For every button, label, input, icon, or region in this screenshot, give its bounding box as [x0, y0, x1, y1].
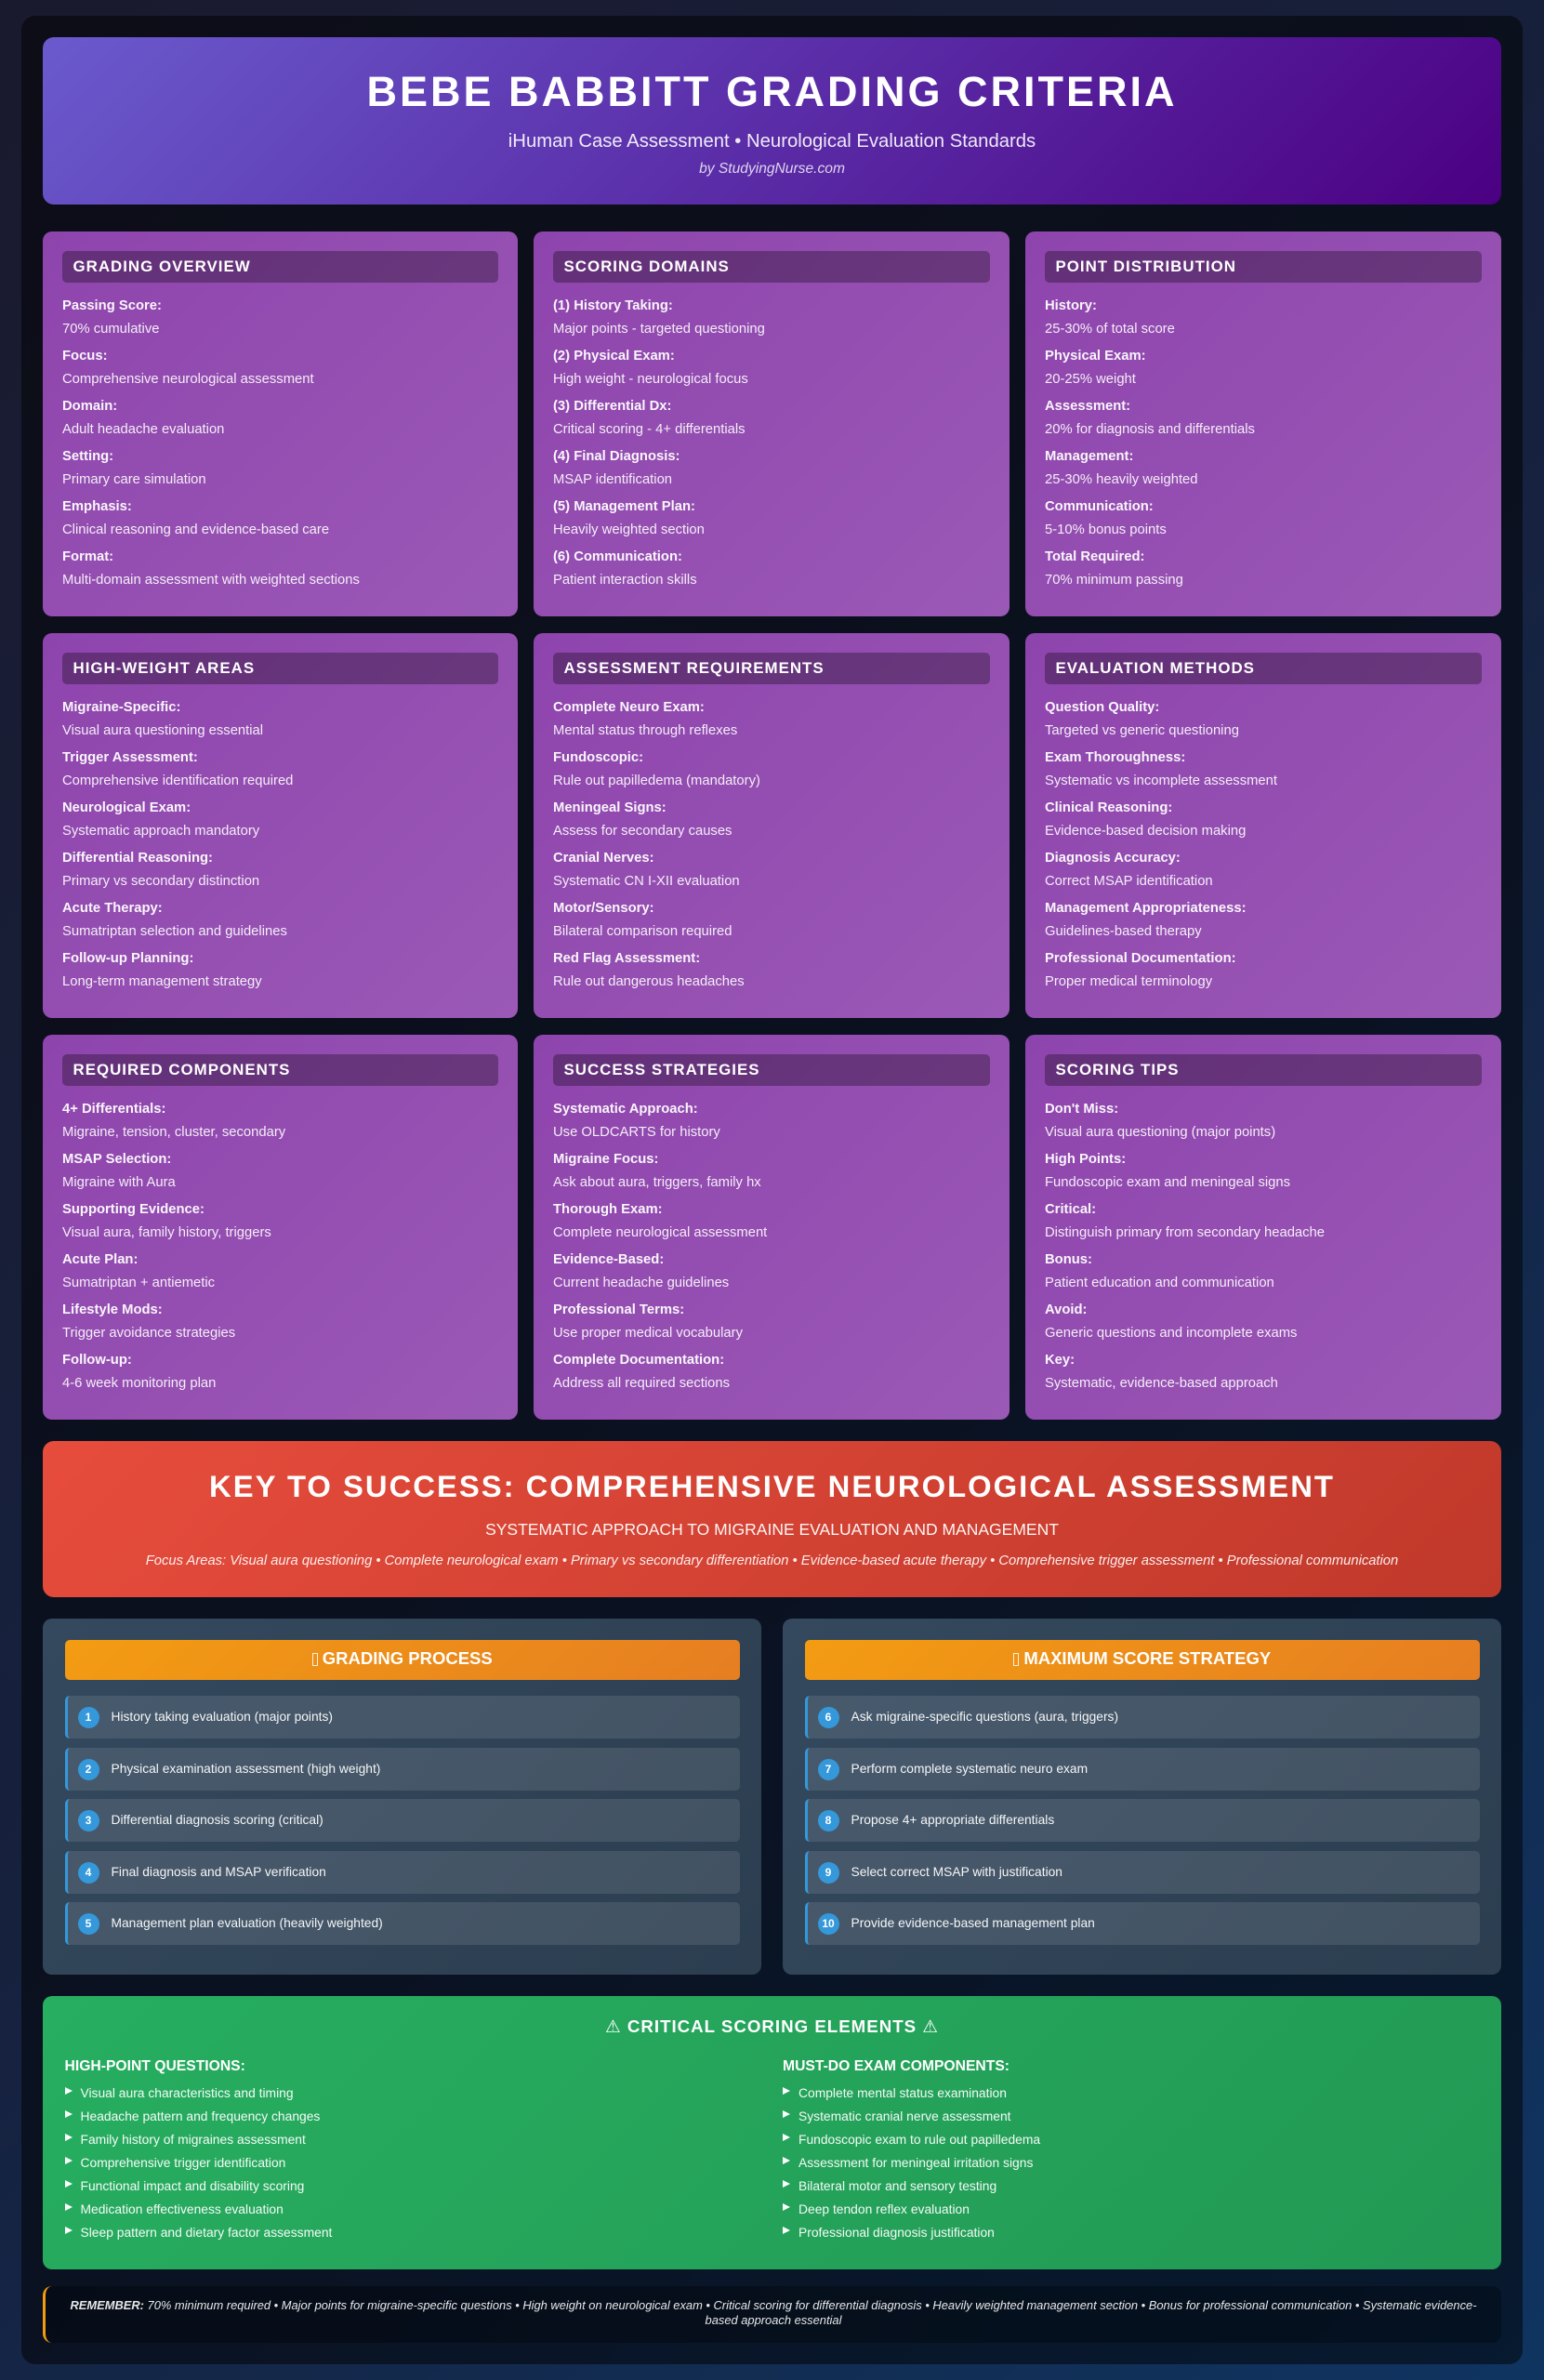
item: management appropriateness: Management Appropriateness: — [1045, 901, 1247, 916]
item: format: Multi-domain assessment with weighted sections — [62, 573, 360, 588]
item: acute plan: Sumatriptan + antiemetic — [62, 1276, 215, 1290]
panel: scoring tips — [1025, 1035, 1501, 1420]
item: communication: Patient interaction skills — [553, 573, 697, 588]
step 2: Physical examination assessment (high weight) — [112, 1762, 380, 1776]
panel: success strategies — [534, 1035, 1010, 1420]
step 1 — [65, 1696, 740, 1739]
item: differentials: Migraine, tension, cluster, secondary — [62, 1125, 285, 1140]
list: high-point questions: Family history of migraines assessment — [80, 2132, 306, 2147]
item: fundoscopic — [553, 750, 760, 788]
item: acute therapy: Acute Therapy: — [62, 901, 163, 916]
item: msap selection: Migraine with Aura — [62, 1175, 176, 1190]
item: differential: Critical scoring - 4+ differentials — [553, 422, 746, 437]
heading — [62, 251, 498, 283]
panel: evaluation methods — [1025, 633, 1501, 1018]
item: high points — [1045, 1148, 1482, 1198]
item: migraine-specific: Migraine-Specific: — [62, 700, 180, 715]
item: final diagnosis — [553, 449, 680, 487]
item: diagnosis accuracy — [1045, 851, 1213, 889]
item: exam thoroughness: Systematic vs incomplete assessment — [1045, 774, 1277, 788]
list: high-point questions: Functional impact and disability scoring — [80, 2178, 304, 2193]
step 10: Provide evidence-based management plan — [851, 1916, 1095, 1930]
item: professional documentation: Professional Documentation: — [1045, 951, 1236, 966]
item: clinical reasoning: Clinical Reasoning: — [1045, 800, 1172, 815]
heading: EVALUATION METHODS — [1056, 659, 1255, 677]
step 9: 9 — [825, 1865, 831, 1878]
item: emphasis: Clinical reasoning and evidence-based care — [62, 522, 329, 537]
step 6: 6 — [825, 1711, 831, 1724]
item: don't miss: Visual aura questioning (major points) — [1045, 1125, 1275, 1140]
heading — [62, 653, 498, 684]
item: differential — [553, 399, 746, 437]
item: red flag assessment: Red Flag Assessment: — [553, 951, 700, 966]
item: bonus: Patient education and communication — [1045, 1276, 1274, 1290]
item: don't miss: Don't Miss: — [1045, 1102, 1118, 1117]
list: high-point questions — [65, 2056, 716, 2244]
item: total required: 70% minimum passing — [1045, 573, 1183, 588]
item: clinical reasoning: Evidence-based decision making — [1045, 824, 1246, 839]
item: meningeal signs — [553, 800, 732, 839]
panel: critical scoring elements — [43, 1996, 1501, 2269]
item: differential reasoning: Primary vs secondary distinction — [62, 874, 259, 889]
step 2: 2 — [86, 1763, 91, 1776]
item: physical exam: Physical Exam: — [1045, 349, 1146, 364]
item: avoid: Generic questions and incomplete exams — [1045, 1326, 1297, 1341]
step 5: Management plan evaluation (heavily weighted) — [112, 1916, 383, 1930]
heading: SUCCESS STRATEGIES — [563, 1061, 760, 1078]
item: acute therapy: Sumatriptan selection and guidelines — [62, 924, 287, 939]
item: communication — [553, 549, 697, 588]
item: red flag assessment — [553, 951, 745, 989]
item: diagnosis accuracy: Correct MSAP identification — [1045, 874, 1213, 889]
item: thorough exam: Complete neurological assessment — [553, 1225, 767, 1240]
heading: SCORING TIPS — [1056, 1061, 1180, 1078]
item: msap selection — [62, 1152, 176, 1190]
step 3 — [65, 1799, 740, 1842]
callout heading: KEY TO SUCCESS: COMPREHENSIVE NEUROLOGICAL ASSESSMENT — [209, 1469, 1335, 1503]
heading: ASSESSMENT REQUIREMENTS — [563, 659, 825, 677]
item: setting — [62, 449, 206, 487]
item: communication — [1045, 499, 1167, 537]
item: follow-up planning: Follow-up Planning: — [62, 951, 193, 966]
panel: grading overview — [43, 231, 518, 616]
step 9 — [805, 1851, 1480, 1894]
item: follow-up: 4-6 week monitoring plan — [62, 1376, 216, 1391]
item: setting: Primary care simulation — [62, 472, 206, 487]
item: emphasis: Emphasis: — [62, 499, 132, 514]
item: differentials: 4+ Differentials: — [62, 1102, 165, 1117]
item: follow-up — [62, 1349, 498, 1399]
section heading: ⚠ CRITICAL SCORING ELEMENTS ⚠ — [605, 2016, 939, 2036]
item: motor/sensory — [553, 901, 732, 939]
item: motor/sensory: Bilateral comparison required — [553, 924, 732, 939]
item: differential reasoning — [62, 851, 259, 889]
step 1: 1 — [86, 1711, 91, 1724]
step 6 — [805, 1696, 1480, 1739]
item: passing score: Passing Score: — [62, 298, 162, 313]
panel: required components — [43, 1035, 518, 1420]
heading — [1045, 251, 1482, 283]
item: migraine-specific: Visual aura questioning essential — [62, 723, 263, 738]
step 7 — [805, 1748, 1480, 1791]
item: evidence-based: Evidence-Based: — [553, 1252, 664, 1267]
list: high-point questions: Medication effectiveness evaluation — [80, 2202, 284, 2216]
item: complete neuro exam: Mental status through reflexes — [553, 723, 737, 738]
step 3: Differential diagnosis scoring (critical) — [112, 1813, 323, 1827]
callout subheading: SYSTEMATIC APPROACH TO MIGRAINE EVALUATION AND MANAGEMENT — [485, 1520, 1059, 1539]
item: professional terms: Professional Terms: — [553, 1302, 684, 1317]
item: professional documentation — [1045, 951, 1236, 989]
item: question quality: Targeted vs generic questioning — [1045, 723, 1239, 738]
item: systematic approach: Systematic Approach: — [553, 1102, 698, 1117]
item: lifestyle mods: Lifestyle Mods: — [62, 1302, 163, 1317]
item: complete documentation: Address all required sections — [553, 1376, 730, 1391]
item: thorough exam — [553, 1198, 990, 1249]
item: domain — [62, 399, 224, 437]
item: migraine focus: Ask about aura, triggers, family hx — [553, 1175, 761, 1190]
heading: HIGH-WEIGHT AREAS — [73, 659, 255, 677]
strategy heading: MAXIMUM SCORE STRATEGY — [1023, 1648, 1271, 1668]
item: key: Key: — [1045, 1353, 1075, 1368]
item: assessment: 20% for diagnosis and differentials — [1045, 422, 1255, 437]
item: avoid — [1045, 1299, 1482, 1349]
item: exam thoroughness — [1045, 750, 1277, 788]
item: assessment — [1045, 399, 1255, 437]
item: supporting evidence: Supporting Evidence: — [62, 1202, 205, 1217]
item: management plan: Heavily weighted section — [553, 522, 705, 537]
step 5 — [65, 1902, 740, 1945]
item: question quality — [1045, 700, 1239, 738]
item: history: History: — [1045, 298, 1097, 313]
item: msap selection: MSAP Selection: — [62, 1152, 171, 1167]
callout: key to success — [43, 1441, 1501, 1597]
item: setting: Setting: — [62, 449, 113, 464]
item: management plan — [553, 499, 705, 537]
item: final diagnosis: MSAP identification — [553, 472, 672, 487]
step 3: 3 — [86, 1813, 91, 1826]
item: physical exam: High weight - neurological focus — [553, 372, 748, 387]
list: high-point questions: Visual aura characteristics and timing — [80, 2085, 294, 2100]
item: meningeal signs: Meningeal Signs: — [553, 800, 666, 815]
item: final diagnosis: (4) Final Diagnosis: — [553, 449, 680, 464]
process heading: GRADING PROCESS — [323, 1648, 493, 1668]
heading: REQUIRED COMPONENTS — [73, 1061, 290, 1078]
item: differential reasoning: Differential Reasoning: — [62, 851, 213, 866]
item: management: Management: — [1045, 449, 1133, 464]
list: high-point questions: HIGH-POINT QUESTIONS: — [65, 2058, 245, 2074]
focus areas: Focus Areas: Visual aura questioning • Complete neurological exam • Primary vs secondary differentiation • Evidence-based acute therapy • Comprehensive trigger assessment • Professional communication — [146, 1554, 1398, 1568]
callout: remember note: REMEMBER: 70% minimum required • Major points for migraine-specific questions • High weight on neurological exam • Critical scoring for differential diagnosis • Heavily weighted management section • Bonus for professional communication • Systematic evidence-based approach essential — [70, 2298, 1477, 2327]
item: management appropriateness — [1045, 901, 1247, 939]
heading — [553, 251, 990, 283]
item: trigger assessment: Comprehensive identification required — [62, 774, 293, 788]
item: focus — [62, 349, 314, 387]
list: must-do exam components: Complete mental status examination — [798, 2085, 1007, 2100]
item: emphasis — [62, 499, 329, 537]
item: critical — [1045, 1198, 1482, 1249]
step 10: 10 — [822, 1917, 835, 1930]
item: physical exam: (2) Physical Exam: — [553, 349, 675, 364]
panel: maximum score strategy — [783, 1619, 1501, 1975]
heading — [553, 1054, 990, 1086]
item: trigger assessment: Trigger Assessment: — [62, 750, 198, 765]
heading — [62, 1054, 498, 1086]
item: fundoscopic: Fundoscopic: — [553, 750, 643, 765]
item: bonus: Bonus: — [1045, 1252, 1092, 1267]
item: domain: Adult headache evaluation — [62, 422, 224, 437]
item: history: 25-30% of total score — [1045, 322, 1175, 337]
item: communication: (6) Communication: — [553, 549, 682, 564]
item: lifestyle mods — [62, 1299, 498, 1349]
item: passing score: 70% cumulative — [62, 322, 159, 337]
item: avoid: Avoid: — [1045, 1302, 1087, 1317]
list: must-do exam components: Fundoscopic exam to rule out papilledema — [798, 2132, 1040, 2147]
item: communication: 5-10% bonus points — [1045, 522, 1167, 537]
step 9: Select correct MSAP with justification — [851, 1865, 1062, 1879]
item: question quality: Question Quality: — [1045, 700, 1159, 715]
list: must-do exam components: Systematic cranial nerve assessment — [798, 2109, 1011, 2123]
item: diagnosis accuracy: Diagnosis Accuracy: — [1045, 851, 1181, 866]
list: must-do exam components — [783, 2056, 1433, 2244]
item: physical exam — [553, 349, 748, 387]
heading — [1045, 1054, 1482, 1086]
item: motor/sensory: Motor/Sensory: — [553, 901, 654, 916]
item: key — [1045, 1349, 1482, 1399]
item: neurological exam — [62, 800, 260, 839]
title: BEBE BABBITT GRADING CRITERIA — [366, 68, 1177, 115]
step 7: 7 — [825, 1763, 831, 1776]
item: exam thoroughness: Exam Thoroughness: — [1045, 750, 1185, 765]
step 1: History taking evaluation (major points) — [112, 1710, 333, 1724]
item: systematic approach: Use OLDCARTS for history — [553, 1125, 720, 1140]
item: migraine focus: Migraine Focus: — [553, 1152, 658, 1167]
item: history — [1045, 298, 1175, 337]
item: assessment: Assessment: — [1045, 399, 1130, 414]
step 8 — [805, 1799, 1480, 1842]
item: supporting evidence — [62, 1202, 271, 1240]
list: high-point questions: Comprehensive trigger identification — [80, 2155, 285, 2170]
panel: scoring domains — [534, 231, 1010, 616]
item: differentials — [62, 1102, 286, 1140]
item: neurological exam: Systematic approach mandatory — [62, 824, 259, 839]
item: passing score — [62, 298, 162, 337]
item: differential: (3) Differential Dx: — [553, 399, 671, 414]
item: supporting evidence: Visual aura, family history, triggers — [62, 1225, 271, 1240]
step 10 — [805, 1902, 1480, 1945]
heading — [1045, 653, 1482, 684]
panel: assessment requirements — [534, 633, 1010, 1018]
list: high-point questions: Headache pattern and frequency changes — [80, 2109, 320, 2123]
item: acute plan: Acute Plan: — [62, 1252, 138, 1267]
item: physical exam — [1045, 349, 1146, 387]
item: meningeal signs: Assess for secondary causes — [553, 824, 732, 839]
panel: high-weight areas — [43, 633, 518, 1018]
item: cranial nerves: Systematic CN I-XII evaluation — [553, 874, 740, 889]
item: critical: Distinguish primary from secondary headache — [1045, 1225, 1325, 1240]
step 2 — [65, 1748, 740, 1791]
item: key: Systematic, evidence-based approach — [1045, 1376, 1278, 1391]
item: management — [1045, 449, 1198, 487]
step 5: 5 — [86, 1917, 91, 1930]
heading: SCORING DOMAINS — [563, 258, 730, 275]
list: must-do exam components: MUST-DO EXAM COMPONENTS: — [783, 2058, 1010, 2074]
item: fundoscopic: Rule out papilledema (mandatory) — [553, 774, 760, 788]
item: follow-up planning — [62, 951, 262, 989]
item: communication: Communication: — [1045, 499, 1154, 514]
item: history taking: (1) History Taking: — [553, 298, 673, 313]
panel: point distribution — [1025, 231, 1501, 616]
item: follow-up planning: Long-term management strategy — [62, 974, 262, 989]
item: total required — [1045, 549, 1183, 588]
item: red flag assessment: Rule out dangerous headaches — [553, 974, 745, 989]
item: focus: Comprehensive neurological assessment — [62, 372, 314, 387]
item: professional terms: Use proper medical vocabulary — [553, 1326, 743, 1341]
step 4 — [65, 1851, 740, 1894]
item: physical exam: 20-25% weight — [1045, 372, 1136, 387]
list: must-do exam components: Deep tendon reflex evaluation — [798, 2202, 970, 2216]
item: bonus — [1045, 1249, 1482, 1299]
item: migraine-specific — [62, 700, 263, 738]
strategy heading — [805, 1640, 1480, 1680]
process heading — [65, 1640, 740, 1680]
step 6: Ask migraine-specific questions (aura, triggers) — [851, 1710, 1118, 1724]
item: follow-up: Follow-up: — [62, 1353, 132, 1368]
item: high points: Fundoscopic exam and meningeal signs — [1045, 1175, 1290, 1190]
item: format: Format: — [62, 549, 113, 564]
list: must-do exam components: Assessment for meningeal irritation signs — [798, 2155, 1033, 2170]
item: acute therapy — [62, 901, 287, 939]
panel: grading process — [43, 1619, 761, 1975]
item: management appropriateness: Guidelines-based therapy — [1045, 924, 1202, 939]
list: must-do exam components: Professional diagnosis justification — [798, 2225, 995, 2240]
byline: by StudyingNurse.com — [699, 161, 845, 177]
item: management: 25-30% heavily weighted — [1045, 472, 1198, 487]
step 8: Propose 4+ appropriate differentials — [851, 1813, 1054, 1827]
item: migraine focus — [553, 1148, 990, 1198]
item: high points: High Points: — [1045, 1152, 1126, 1167]
item: cranial nerves — [553, 851, 740, 889]
item: total required: Total Required: — [1045, 549, 1144, 564]
list: must-do exam components: Bilateral motor and sensory testing — [798, 2178, 996, 2193]
item: focus: Focus: — [62, 349, 108, 364]
heading: GRADING OVERVIEW — [73, 258, 251, 275]
item: history taking — [553, 298, 765, 337]
item: complete documentation: Complete Documentation: — [553, 1353, 724, 1368]
heading — [553, 653, 990, 684]
item: format — [62, 549, 360, 588]
item: thorough exam: Thorough Exam: — [553, 1202, 663, 1217]
item: critical: Critical: — [1045, 1202, 1096, 1217]
item: complete neuro exam: Complete Neuro Exam: — [553, 700, 705, 715]
item: acute plan — [62, 1249, 498, 1299]
item: professional documentation: Proper medical terminology — [1045, 974, 1212, 989]
step 4: Final diagnosis and MSAP verification — [112, 1865, 326, 1879]
item: neurological exam: Neurological Exam: — [62, 800, 191, 815]
item: evidence-based — [553, 1249, 990, 1299]
item: complete neuro exam — [553, 700, 737, 738]
step 7: Perform complete systematic neuro exam — [851, 1762, 1088, 1776]
header banner — [43, 37, 1501, 205]
item: trigger assessment — [62, 750, 293, 788]
item: complete documentation — [553, 1349, 990, 1399]
item: cranial nerves: Cranial Nerves: — [553, 851, 654, 866]
callout: remember note — [43, 2286, 1501, 2343]
subtitle: iHuman Case Assessment • Neurological Evaluation Standards — [508, 131, 1036, 152]
item: clinical reasoning — [1045, 800, 1246, 839]
item: domain: Domain: — [62, 399, 117, 414]
item: evidence-based: Current headache guidelines — [553, 1276, 729, 1290]
list: high-point questions: Sleep pattern and dietary factor assessment — [80, 2225, 332, 2240]
step 4: 4 — [86, 1865, 91, 1878]
heading: POINT DISTRIBUTION — [1056, 258, 1236, 275]
step 8: 8 — [825, 1813, 831, 1826]
item: management plan: (5) Management Plan: — [553, 499, 695, 514]
item: systematic approach — [553, 1098, 990, 1148]
item: lifestyle mods: Trigger avoidance strategies — [62, 1326, 235, 1341]
item: don't miss — [1045, 1098, 1482, 1148]
item: history taking: Major points - targeted questioning — [553, 322, 765, 337]
item: professional terms — [553, 1299, 990, 1349]
